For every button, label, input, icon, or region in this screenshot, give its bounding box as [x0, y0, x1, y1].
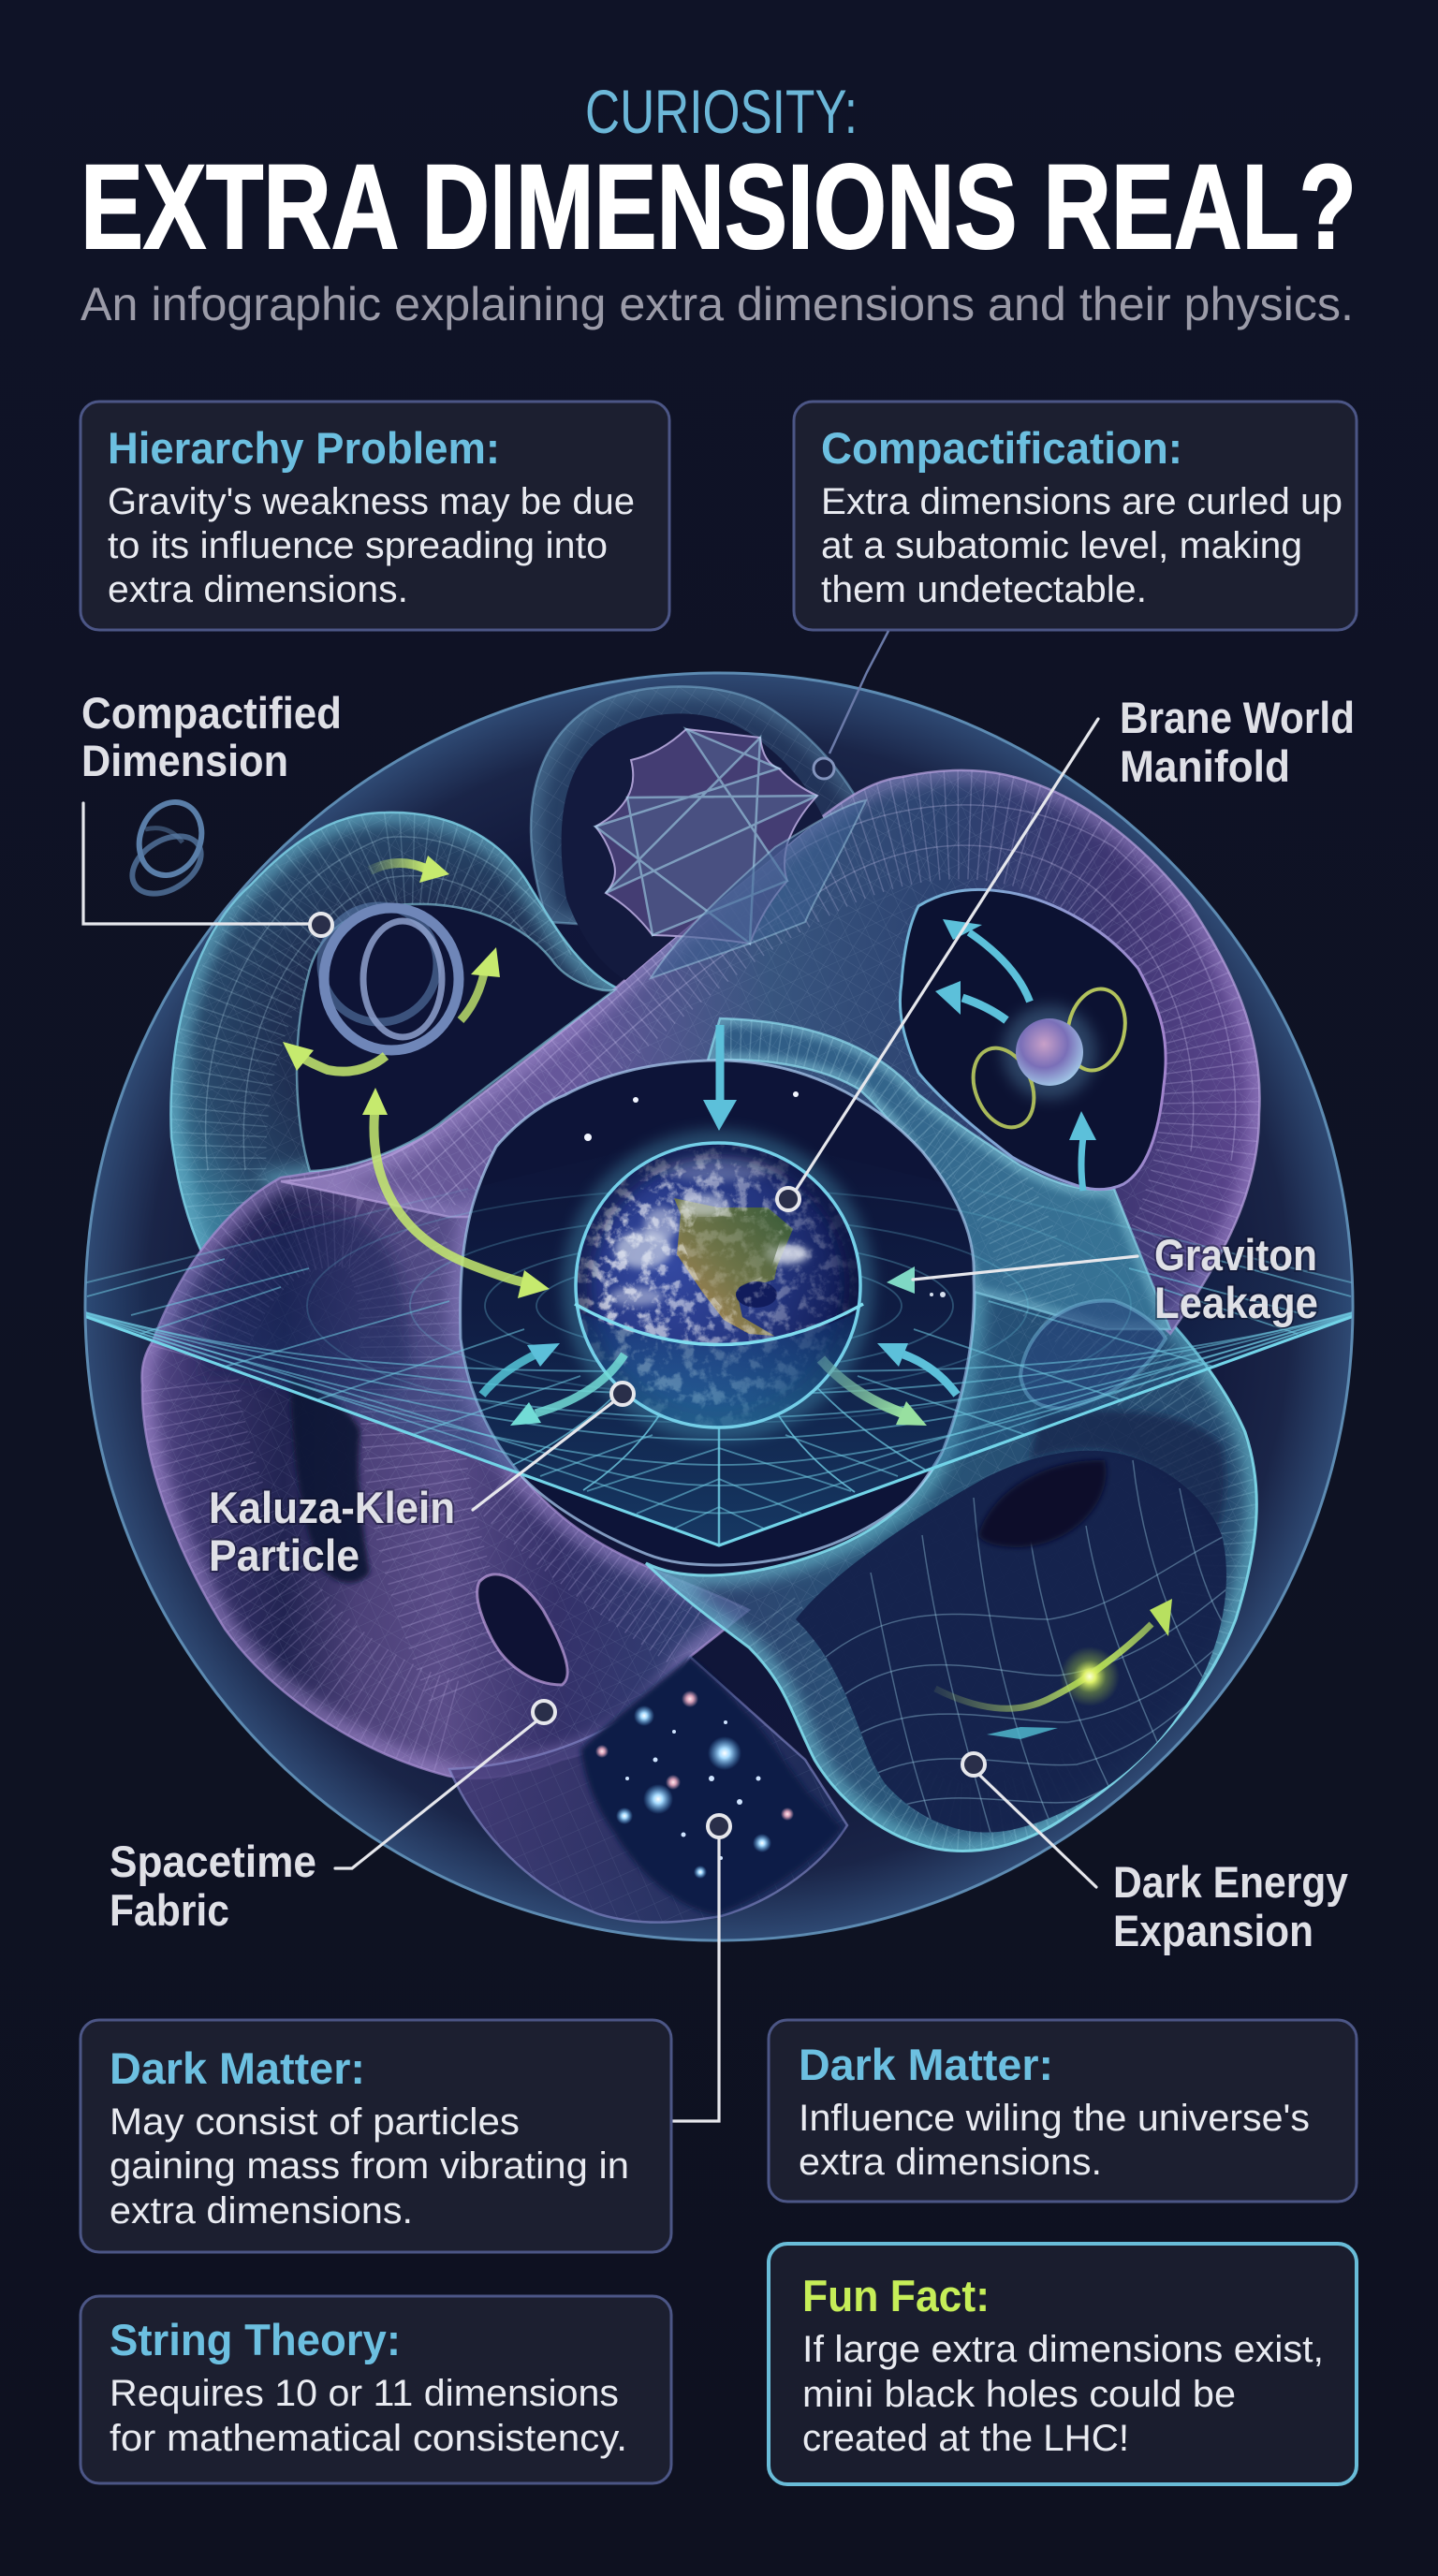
hole: lower right: [978, 1460, 1107, 1547]
panel: string theory: [81, 2296, 671, 2483]
subtitle: An infographic explaining extra dimensions and their physics.: [81, 278, 1354, 330]
gravity arrow down to earth: [703, 1025, 737, 1131]
panel: dark matter right: Dark Matter:: [799, 2040, 1053, 2089]
title block: [81, 77, 1357, 330]
earth rim: [576, 1143, 860, 1427]
funnel interior: [796, 1451, 1226, 1833]
plane arrow down-left: [510, 1354, 624, 1426]
plane front edge: [86, 1315, 1352, 1547]
label: dark energy expansion: [1113, 1857, 1348, 1955]
diagonal fold over polyhedron: [651, 800, 866, 978]
lime arrows around torus: [283, 856, 550, 1298]
plane ring through earth: [575, 1304, 863, 1344]
main diagonal and upper-right ring: [281, 770, 1260, 1334]
icon: earth: [562, 1130, 874, 1442]
icon: polyhedron: [595, 729, 817, 944]
panel: fun fact: mini black holes could be: [802, 2374, 1236, 2415]
panel: compactification: Compactification:: [821, 423, 1182, 473]
panel: dark matter left: gaining mass from vibrating in: [110, 2145, 629, 2187]
lower bowl: [562, 1304, 874, 1442]
bottom translucent lobe: [449, 1657, 847, 1923]
sphere limb shade: [578, 1145, 858, 1426]
left dark strip: [290, 1376, 370, 1583]
panel: dark matter left: [81, 2020, 671, 2252]
label: compactified dimension: [81, 688, 342, 785]
label: spacetime fabric: Fabric: [110, 1885, 229, 1935]
panel: dark matter right: extra dimensions.: [799, 2142, 1102, 2183]
callout line: spacetime fabric: [335, 1701, 555, 1868]
label: brane world manifold: [1120, 693, 1355, 791]
arrow right: [461, 947, 500, 1020]
callout line: brane world: [777, 719, 1098, 1210]
plane arrow up-right side: [877, 1343, 957, 1395]
label: dark energy expansion: Dark Energy: [1113, 1857, 1348, 1907]
label: graviton leakage: [1154, 1230, 1318, 1327]
gulf: [736, 1281, 777, 1308]
galaxy stars: [595, 1690, 794, 1879]
label: compactified dimension: Dimension: [81, 736, 288, 785]
teal right band: [708, 1018, 1170, 1329]
callout line: compactification: [814, 631, 888, 779]
arrow bottom: [283, 1042, 386, 1072]
blue arrows: [482, 919, 1096, 1426]
callout line: kaluza-klein: [473, 1383, 634, 1510]
sphere: manifold diagram: [30, 631, 1408, 2484]
label: graviton leakage: Leakage: [1154, 1278, 1318, 1327]
label: compactified dimension: Compactified: [81, 688, 342, 738]
panel: dark matter left: extra dimensions.: [110, 2190, 413, 2232]
callout line: dark matter: [671, 1815, 730, 2121]
panel: string theory: String Theory:: [110, 2315, 401, 2364]
lower-left purple lobe: [142, 1119, 749, 1778]
panel: compactification: them undetectable.: [821, 569, 1147, 610]
panel: dark matter left: May consist of particles: [110, 2101, 520, 2143]
kicker: curiosity: CURIOSITY:: [585, 77, 858, 146]
north america landmass: [674, 1198, 793, 1336]
panel: string theory: Requires 10 or 11 dimensions: [110, 2373, 619, 2414]
funnel grid: [814, 1460, 1236, 1839]
panel: hierarchy problem: Hierarchy Problem:: [108, 423, 500, 473]
arch shading: [201, 1210, 412, 1397]
panel: string theory: for mathematical consistency.: [110, 2418, 627, 2459]
land re-emphasis: [683, 1217, 782, 1306]
hole behind polyhedron: [562, 713, 824, 980]
plane arrow up-left side: [482, 1343, 560, 1395]
central stars: [584, 1091, 946, 1297]
icon: graviton atom: [962, 984, 1132, 1136]
panel: fun fact: created at the LHC!: [802, 2418, 1129, 2459]
atom arrow upper: [943, 919, 1030, 1002]
callout line: dark energy: [962, 1753, 1096, 1887]
atom arrow lower: [1069, 1111, 1096, 1191]
panel: hierarchy problem: Gravity's weakness may be due: [108, 481, 635, 522]
panel: compactification: at a subatomic level, making: [821, 525, 1302, 566]
panel: fun fact: [769, 2244, 1357, 2484]
icon: compactified torus: [321, 906, 459, 1050]
icon: small coil: [122, 793, 213, 905]
graviton arrowhead: [887, 1266, 915, 1294]
panel: compactification: [794, 402, 1357, 630]
label: spacetime fabric: Spacetime: [110, 1837, 316, 1886]
panel: fun fact: If large extra dimensions exist,: [802, 2329, 1324, 2370]
swirl right of plane: [1020, 1301, 1166, 1409]
plane back edges: [86, 1188, 1352, 1283]
hole: small oval: [477, 1574, 567, 1685]
panel: hierarchy problem: [81, 402, 669, 630]
label: spacetime fabric: [110, 1837, 316, 1935]
cloud noise: [576, 1143, 860, 1427]
shaded area under swirl: [1030, 1411, 1225, 1535]
long double arrow: [362, 1088, 550, 1298]
top lobe: [531, 686, 871, 936]
callout line: compactified dimension: [83, 803, 332, 936]
panel: hierarchy problem: to its influence spreading into: [108, 525, 608, 566]
panel: hierarchy problem: extra dimensions.: [108, 569, 408, 610]
plane arrow down-right: [821, 1359, 927, 1426]
outer bubble: [85, 673, 1353, 1940]
panel: compactification: Extra dimensions are curled up: [821, 481, 1343, 522]
label: kaluza-klein particle: [209, 1483, 455, 1580]
panel: dark matter right: Influence wiling the universe's: [799, 2098, 1310, 2139]
galaxy pocket: [580, 1657, 843, 1915]
label: brane world manifold: Manifold: [1120, 741, 1290, 791]
hole: upper right: [900, 889, 1166, 1190]
panel: fun fact: Fun Fact:: [802, 2271, 990, 2320]
label: brane world manifold: Brane World: [1120, 693, 1355, 742]
plane: brane grid: [86, 1188, 1352, 1547]
panel: dark matter right: [769, 2020, 1357, 2202]
hole: centre space: [461, 1061, 974, 1565]
label: dark energy expansion: Expansion: [1113, 1906, 1313, 1955]
cloud masses: [610, 1155, 809, 1306]
lower-right funnel lobe: [646, 1254, 1256, 1851]
teal left band: [169, 811, 617, 1252]
label: graviton leakage: Graviton: [1154, 1230, 1317, 1280]
hole: upper left: [297, 904, 614, 1171]
label: kaluza-klein particle: Particle: [209, 1530, 360, 1580]
arrow top: [370, 856, 449, 883]
manifold surfaces: [142, 686, 1260, 1923]
label: kaluza-klein particle: Kaluza-Klein: [209, 1483, 455, 1532]
atom arrow middle: [935, 981, 1006, 1020]
panel: dark matter left: Dark Matter:: [110, 2043, 365, 2093]
callout line: graviton leakage: [913, 1256, 1137, 1280]
icon: glowing particle with trail: [935, 1599, 1172, 1739]
